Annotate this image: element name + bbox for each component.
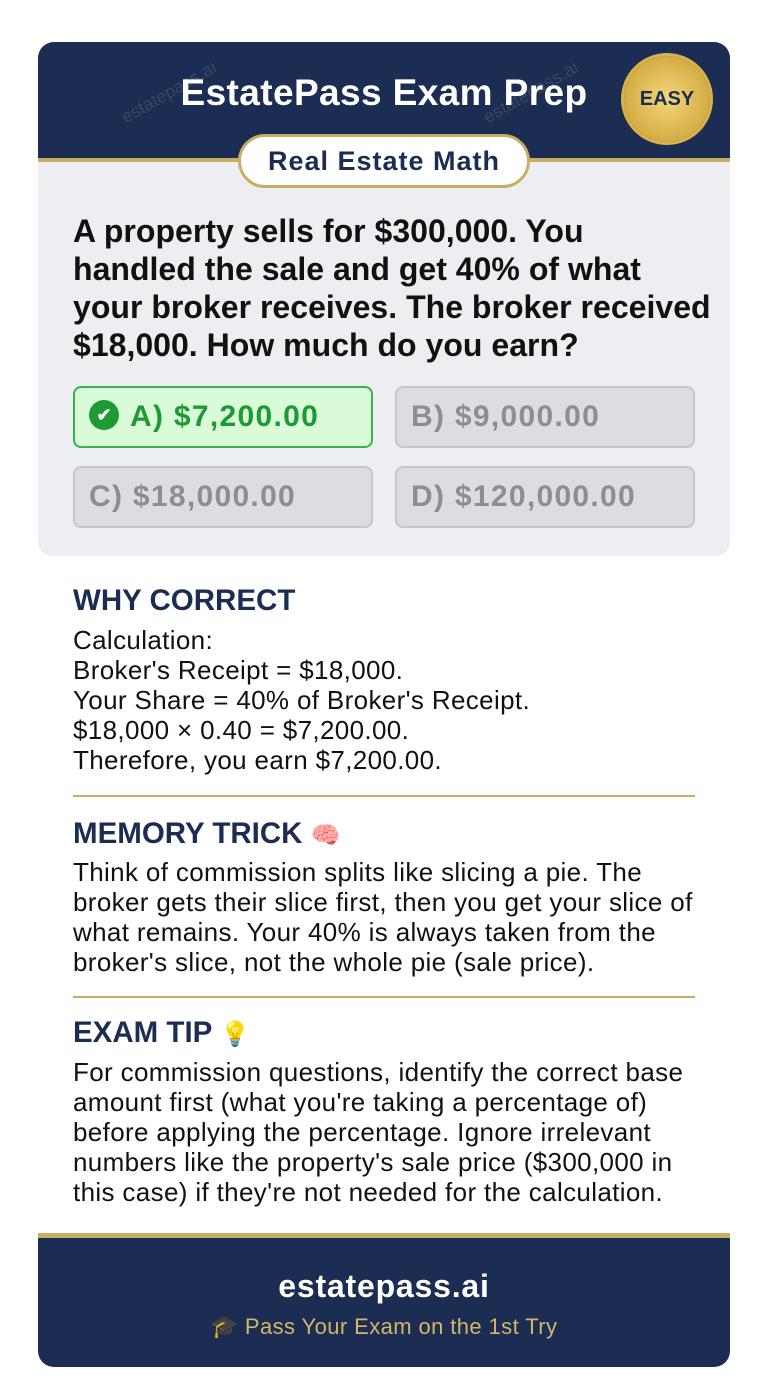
text: calculation: Broker's Receipt = $18,000. xyxy=(73,655,403,685)
header panel xyxy=(38,42,730,160)
option B xyxy=(395,386,695,448)
text: exam tip: numbers like the property's sale price ($300,000 in xyxy=(73,1147,672,1177)
heading: memory trick: MEMORY TRICK 🧠 xyxy=(73,817,341,850)
text: memory trick: broker's slice, not the whole pie (sale price). xyxy=(73,947,594,977)
text: memory trick: what remains. Your 40% is always taken from the xyxy=(73,917,656,947)
text: exam tip xyxy=(73,1057,683,1207)
text: exam tip: before applying the percentage. Ignore irrelevant xyxy=(73,1117,651,1147)
heading: why correct: WHY CORRECT xyxy=(73,584,295,617)
option B: B) $9,000.00 xyxy=(411,400,600,433)
option A correct: A) $7,200.00 xyxy=(130,400,319,433)
option C xyxy=(73,466,373,528)
text: calculation: Therefore, you earn $7,200.00. xyxy=(73,745,442,775)
footer tagline: 🎓 Pass Your Exam on the 1st Try xyxy=(211,1314,557,1339)
text: memory trick: Think of commission splits like slicing a pie. The xyxy=(73,857,642,887)
footer url: estatepass.ai xyxy=(278,1268,490,1304)
pill: Real Estate Math xyxy=(238,134,530,188)
text: memory trick: broker gets their slice first, then you get your slice of xyxy=(73,887,693,917)
question text xyxy=(73,213,711,363)
text: exam tip: this case) if they're not needed for the calculation. xyxy=(73,1177,663,1207)
text: calculation: Your Share = 40% of Broker's Receipt. xyxy=(73,685,530,715)
text: calculation: Calculation: xyxy=(73,625,213,655)
text: calculation: $18,000 × 0.40 = $7,200.00. xyxy=(73,715,409,745)
option D: D) $120,000.00 xyxy=(411,480,636,513)
text: memory trick xyxy=(73,857,693,977)
header panel: estatepass.ai xyxy=(118,57,220,127)
heading: exam tip: EXAM TIP 💡 xyxy=(73,1016,250,1049)
text: exam tip: For commission questions, identify the correct base xyxy=(73,1057,683,1087)
question text: your broker receives. The broker received xyxy=(73,289,711,325)
badge: easy: EASY xyxy=(640,88,694,110)
header panel: estatepass.ai xyxy=(480,57,582,127)
option A correct xyxy=(73,386,373,448)
question panel xyxy=(38,162,730,556)
gold line xyxy=(38,158,730,162)
question text: A property sells for $300,000. You xyxy=(73,213,584,249)
text: exam tip: amount first (what you're taking a percentage of) xyxy=(73,1087,647,1117)
pill: Real Estate Math: Real Estate Math xyxy=(268,146,500,176)
icon: check xyxy=(89,400,119,430)
option D xyxy=(395,466,695,528)
badge: easy xyxy=(624,56,710,142)
option C: C) $18,000.00 xyxy=(89,480,296,513)
icon: check: ✔ xyxy=(96,405,112,425)
question text: $18,000. How much do you earn? xyxy=(73,327,579,363)
question text: handled the sale and get 40% of what xyxy=(73,251,641,287)
text: calculation xyxy=(73,625,530,775)
footer xyxy=(38,1233,730,1367)
title: EstatePass Exam Prep xyxy=(180,72,588,113)
